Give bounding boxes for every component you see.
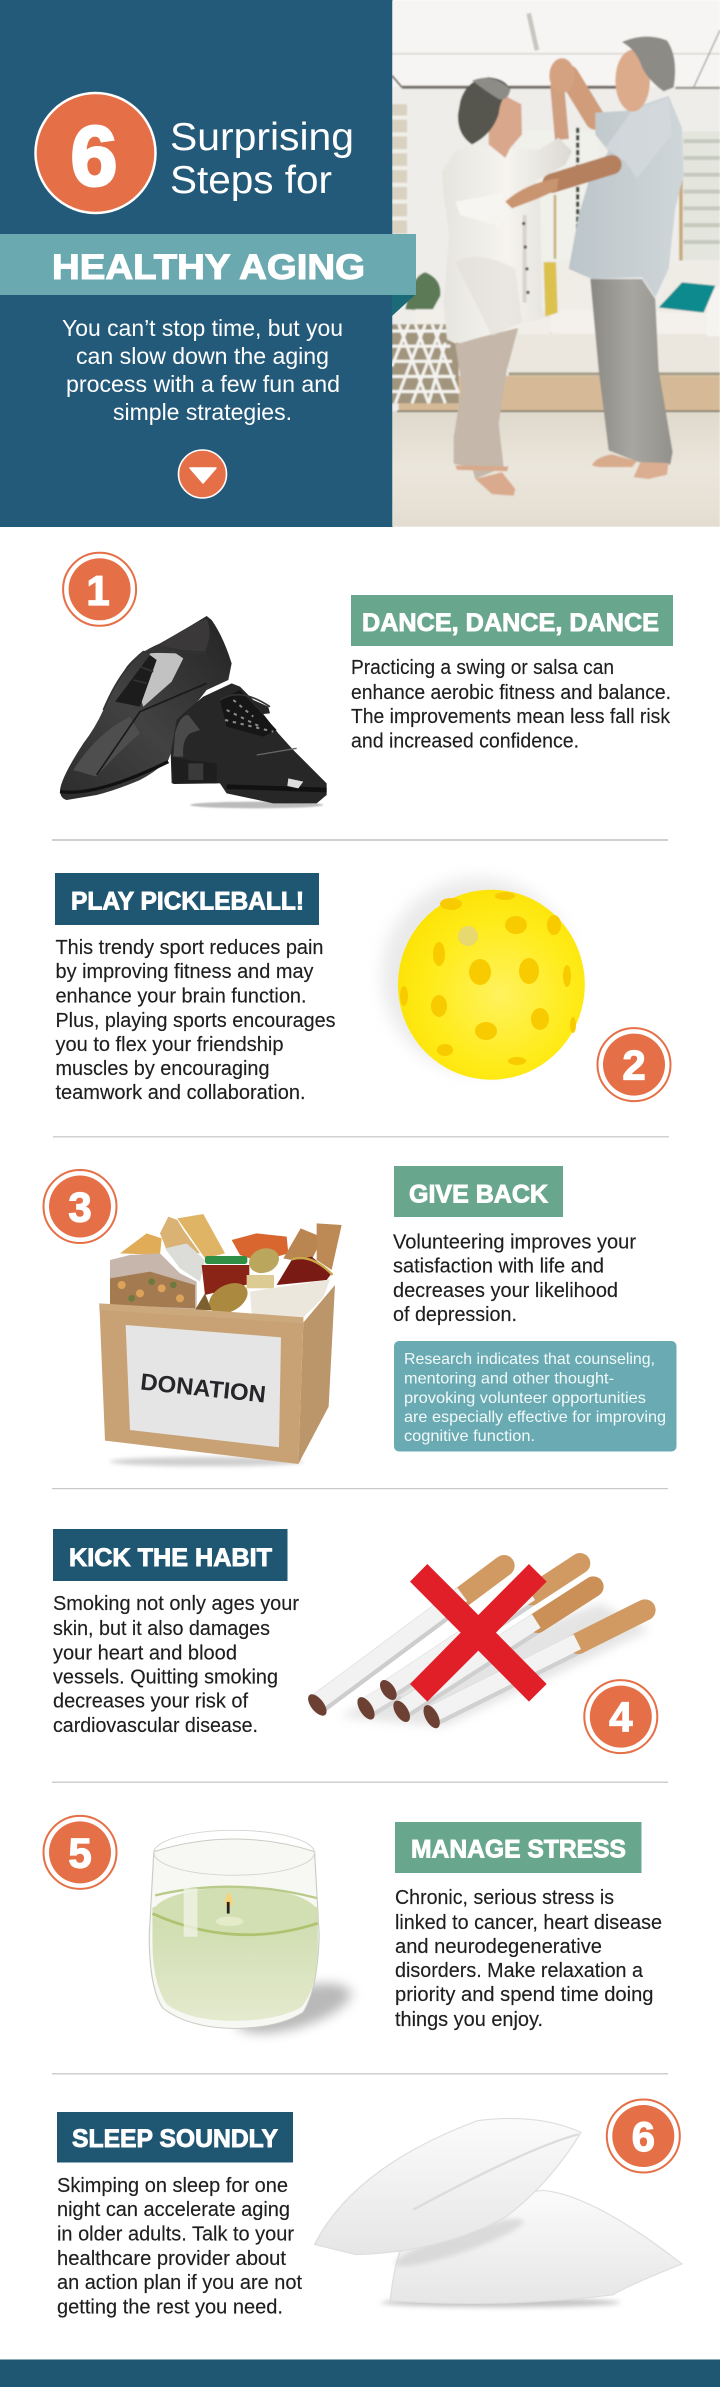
body text: sleep soundly (57, 2174, 302, 2318)
step 5: manage stress (44, 1816, 662, 2044)
badge: 5: 5 (68, 1830, 92, 1876)
body text: kick the habit: Smoking not only ages your (53, 1592, 299, 1615)
heading: sleep soundly: SLEEP SOUNDLY (72, 2125, 278, 2153)
step 1: dance (60, 553, 673, 808)
body text: pickleball: This trendy sport reduces pain (56, 936, 324, 959)
body text: kick the habit (53, 1592, 299, 1737)
heading: play pickleball: PLAY PICKLEBALL! (71, 888, 304, 916)
step 4: kick the habit (53, 1529, 657, 1753)
badge: 1: 1 (86, 567, 110, 614)
badge: 4 (584, 1680, 657, 1753)
banner title: HEALTHY AGING (52, 248, 365, 287)
step 2: pickleball (55, 873, 670, 1104)
image: green candle in a glass (149, 1830, 358, 2044)
badge: 3 (44, 1170, 116, 1243)
heading: kick the habit (53, 1529, 288, 1581)
badge: big number 6 (36, 93, 156, 213)
body text: give back: decreases your likelihood (393, 1279, 618, 1302)
donation label text: DONATION (139, 1368, 267, 1408)
rug and floor (399, 376, 720, 411)
body text: pickleball: Plus, playing sports encourages (56, 1009, 336, 1032)
panel: header blue background (0, 0, 393, 527)
image: yellow pickleball (382, 878, 585, 1080)
box contents (120, 1233, 162, 1255)
body text: kick the habit: your heart and blood (53, 1642, 237, 1664)
box body (298, 1285, 335, 1464)
body text: pickleball: by improving fitness and may (56, 960, 314, 983)
body text: dance: Practicing a swing or salsa can (351, 656, 614, 679)
callout: research: are especially effective for improving (404, 1409, 666, 1426)
image: stacked white pillows (315, 2118, 682, 2307)
body text: manage stress: disorders. Make relaxation a (395, 1959, 644, 1982)
icon: down arrow (178, 450, 226, 498)
body text: pickleball: teamwork and collaboration. (56, 1081, 306, 1104)
heading: kick the habit: KICK THE HABIT (69, 1544, 272, 1572)
callout: research: provoking volunteer opportunities (404, 1390, 646, 1407)
body text: kick the habit: skin, but it also damages (53, 1617, 270, 1640)
badge: 5 (44, 1816, 116, 1889)
body text: manage stress: and neurodegenerative (395, 1935, 602, 1958)
callout: research: cognitive function. (404, 1428, 535, 1445)
heading: give back (394, 1166, 563, 1217)
title: surprising steps for: Steps for (170, 159, 332, 202)
body text: sleep soundly: getting the rest you need. (57, 2296, 283, 2318)
sofa (509, 311, 720, 373)
callout: research: mentoring and other thought- (404, 1370, 614, 1388)
title: surprising steps for: Surprising (170, 116, 354, 159)
body text: kick the habit: cardiovascular disease. (53, 1714, 258, 1737)
photo: senior couple dancing (392, 0, 720, 527)
body text: pickleball (56, 936, 336, 1104)
body text: pickleball: you to flex your friendship (56, 1033, 284, 1056)
intro text: process with a few fun and (66, 371, 340, 397)
intro text: You can’t stop time, but you (62, 315, 343, 341)
heading: give back: GIVE BACK (409, 1180, 548, 1208)
badge: 2: 2 (622, 1042, 646, 1088)
body text: manage stress (395, 1886, 662, 2031)
cigarette tips (305, 1677, 443, 1731)
heading: play pickleball (55, 873, 319, 925)
footer band (0, 2360, 720, 2387)
body text: dance (351, 656, 671, 752)
heading: manage stress (395, 1822, 642, 1873)
body text: dance: enhance aerobic fitness and balance. (351, 681, 671, 704)
heading: dance, dance, dance (351, 595, 673, 646)
body text: give back: of depression. (393, 1303, 517, 1326)
heading: manage stress: MANAGE STRESS (411, 1836, 626, 1864)
step 6: sleep soundly (57, 2100, 682, 2318)
intro text: simple strategies. (113, 399, 292, 425)
title: surprising steps for (170, 116, 354, 202)
badge: 6: 6 (632, 2113, 655, 2160)
plant and wire table (405, 272, 440, 311)
callout: research: Research indicates that counseling, (404, 1351, 655, 1368)
body text: pickleball: muscles by encouraging (56, 1057, 270, 1080)
intro text: can slow down the aging (76, 343, 329, 369)
body text: manage stress: Chronic, serious stress is (395, 1886, 614, 1909)
image: donation box (99, 1214, 342, 1466)
body text: sleep soundly: Skimping on sleep for one (57, 2174, 288, 2197)
body text: sleep soundly: in older adults. Talk to your (57, 2222, 294, 2246)
image: cigarettes crossed out (305, 1563, 650, 1731)
badge: 1 (63, 553, 136, 626)
badge: 2 (598, 1028, 670, 1101)
body text: dance: The improvements mean less fall risk (351, 705, 671, 728)
body text: manage stress: linked to cancer, heart disease (395, 1911, 662, 1934)
body text: kick the habit: vessels. Quitting smoking (53, 1666, 278, 1688)
body text: kick the habit: decreases your risk of (53, 1690, 248, 1712)
body text: give back: Volunteering improves your (393, 1230, 636, 1254)
man (569, 76, 595, 119)
body text: dance: and increased confidence. (351, 730, 579, 752)
cigarettes (316, 1563, 645, 1717)
banner fold (392, 294, 416, 316)
panel: header (0, 0, 720, 527)
body text: sleep soundly: healthcare provider about (57, 2247, 286, 2270)
heading: dance, dance, dance: DANCE, DANCE, DANCE (362, 609, 659, 637)
body text: manage stress: priority and spend time doing (395, 1983, 654, 2006)
body text: sleep soundly: night can accelerate aging (57, 2198, 290, 2221)
badge: 3: 3 (68, 1184, 92, 1230)
step 3: give back (44, 1166, 676, 1466)
banner: healthy aging (0, 234, 416, 316)
intro text (62, 315, 343, 425)
body text: pickleball: enhance your brain function. (56, 984, 306, 1008)
badge: big number 6: 6 (71, 109, 117, 203)
body text: sleep soundly: an action plan if you are not (57, 2271, 302, 2294)
image: black dance shoes (60, 616, 327, 808)
badge: 6 (607, 2100, 680, 2172)
woman (454, 326, 519, 479)
body text: give back: satisfaction with life and (393, 1254, 604, 1278)
callout: research (394, 1341, 676, 1452)
banner band (0, 234, 416, 295)
red x (410, 1564, 547, 1702)
heading: sleep soundly (57, 2112, 293, 2162)
body text: manage stress: things you enjoy. (395, 2008, 543, 2031)
body text: give back (393, 1230, 636, 1326)
badge: 4: 4 (609, 1694, 633, 1740)
